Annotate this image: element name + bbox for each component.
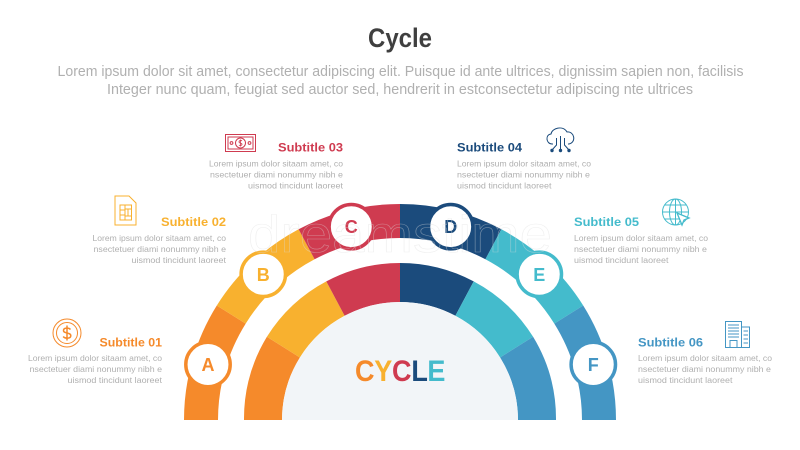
node A (186, 342, 230, 387)
node F (571, 342, 616, 387)
centre word CYCLE: C (392, 355, 412, 388)
block: subtitle 04: Lorem ipsum dolor sitaam amet, co (457, 158, 591, 168)
block: subtitle 02: Lorem ipsum dolor sitaam amet, co (92, 233, 226, 243)
block: subtitle 04: Subtitle 04 (457, 140, 522, 154)
block: subtitle 03: uismod tincidunt laoreet (248, 180, 344, 190)
watermark: dreamstime (248, 206, 552, 264)
block: subtitle 02: nsectetuer diami nonummy nibh e (94, 244, 226, 254)
block: subtitle 04: nsectetuer diami nonummy nibh e (457, 170, 590, 180)
outer arc ring (184, 204, 616, 420)
block: subtitle 06 (638, 336, 772, 385)
block: subtitle 02 (92, 215, 227, 265)
block: subtitle 05: uismod tincidunt laoreet (574, 255, 669, 265)
node B: B (257, 265, 270, 285)
node E (517, 252, 562, 296)
block: subtitle 03: Lorem ipsum dolor sitaam amet, co (209, 158, 343, 168)
block: subtitle 04 (457, 140, 591, 190)
block: subtitle 02: Subtitle 02 (161, 215, 226, 229)
node B (241, 252, 286, 296)
block: subtitle 01 (28, 336, 163, 385)
node A: A (202, 355, 214, 375)
icon: globe with cursor (662, 199, 689, 225)
block: subtitle 06: nsectetuer diami nonummy nibh e (638, 364, 771, 374)
intro text: Lorem ipsum dolor sit amet, consectetur adipiscing elit. Puisque id ante ultrices, dignissim sapien non, facilisis (58, 63, 744, 80)
node D (428, 204, 473, 249)
block: subtitle 01: nsectetuer diami nonummy nibh e (30, 364, 162, 374)
block: subtitle 02: uismod tincidunt laoreet (132, 255, 227, 265)
inner arc ring (244, 263, 556, 420)
block: subtitle 05: Lorem ipsum dolor sitaam amet, co (574, 233, 708, 243)
block: subtitle 01: uismod tincidunt laoreet (68, 375, 163, 385)
block: subtitle 06: Lorem ipsum dolor sitaam amet, co (638, 353, 772, 363)
node C (329, 204, 373, 249)
icon: banknote (226, 134, 256, 152)
block: subtitle 05 (574, 215, 708, 265)
intro text (58, 63, 744, 98)
block: subtitle 01: Lorem ipsum dolor sitaam amet, co (28, 353, 162, 363)
node C: C (345, 217, 358, 237)
block: subtitle 05: nsectetuer diami nonummy nibh e (574, 244, 707, 254)
block: subtitle 03 (209, 140, 344, 190)
centre word CYCLE: E (427, 355, 445, 388)
title: Cycle (368, 23, 432, 53)
centre word CYCLE (355, 355, 445, 388)
block: subtitle 01: Subtitle 01 (100, 336, 162, 350)
icon: SIM card (115, 196, 136, 225)
node F: F (588, 355, 599, 375)
icon: dollar coin (53, 319, 81, 347)
intro text: Integer nunc quam, feugiat sed auctor sed, hendrerit in estconsectetur adipiscing nte ultrices (107, 81, 693, 98)
icon: cloud network (547, 128, 574, 152)
block: subtitle 03: nsectetuer diami nonummy nibh e (210, 170, 343, 180)
centre word CYCLE: L (411, 355, 428, 388)
block: subtitle 06: uismod tincidunt laoreet (638, 375, 733, 385)
node E: E (533, 265, 545, 285)
centre word CYCLE: C (355, 355, 375, 388)
block: subtitle 03: Subtitle 03 (278, 140, 343, 154)
icon: office building (726, 322, 750, 348)
node D: D (444, 217, 457, 237)
centre semicircle (282, 302, 518, 420)
block: subtitle 04: uismod tincidunt laoreet (457, 180, 552, 190)
block: subtitle 05: Subtitle 05 (574, 215, 639, 229)
block: subtitle 06: Subtitle 06 (638, 336, 703, 350)
centre word CYCLE: Y (374, 355, 392, 388)
